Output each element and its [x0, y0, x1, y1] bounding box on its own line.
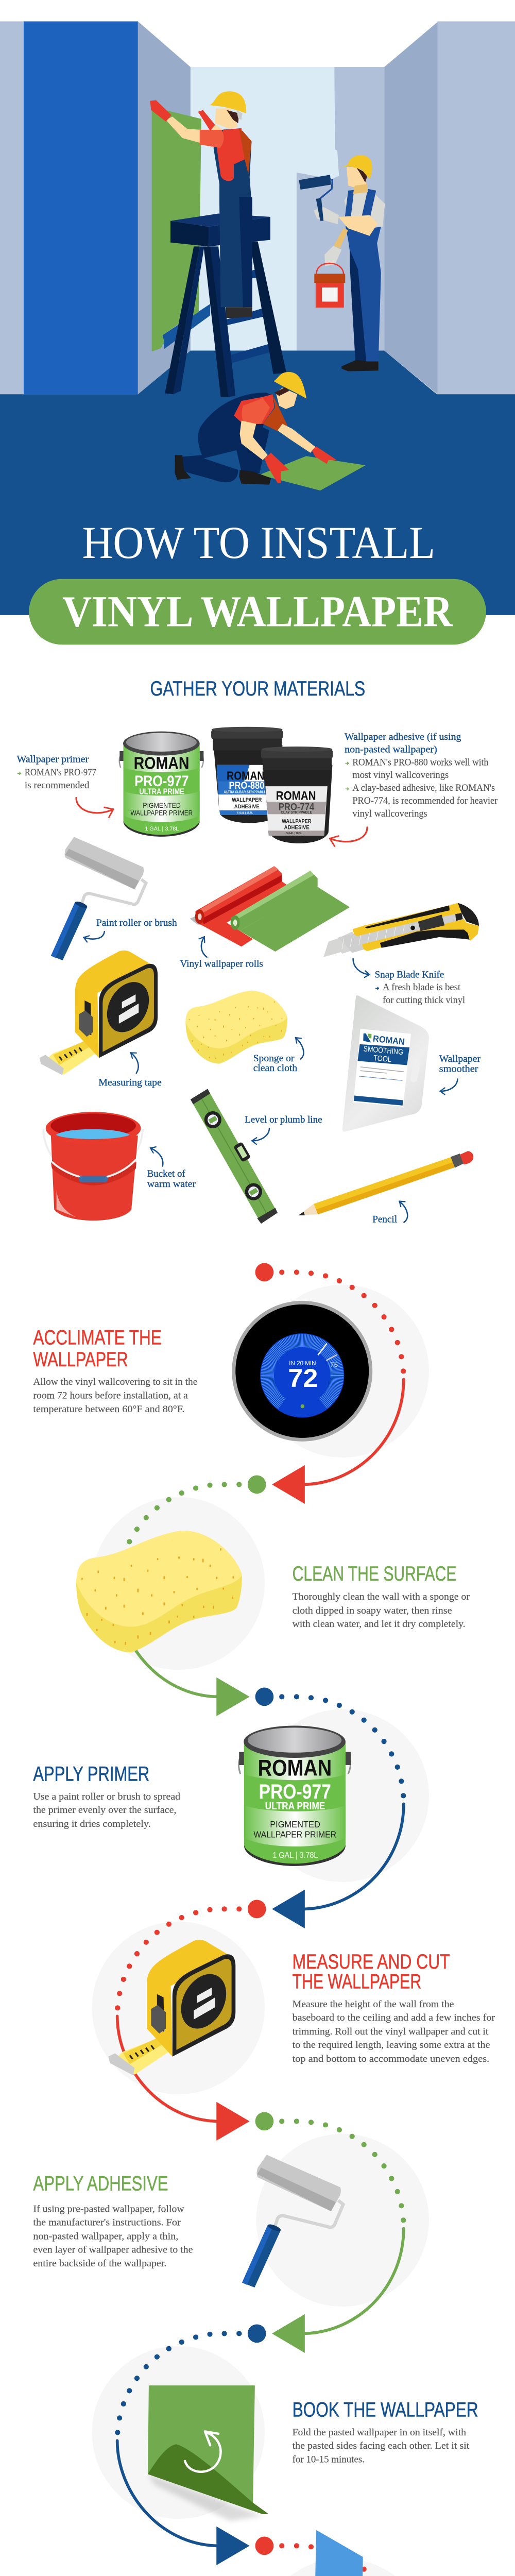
step: acclimate the wallpaper: [33, 1301, 372, 1442]
body: acclimate: [33, 1377, 197, 1415]
primer label: is recommended: [25, 780, 90, 791]
arrow: level: [252, 1128, 269, 1141]
heading: measure and cut: [293, 1951, 450, 1993]
icon: PRO-774 bucket: CLAY STRIPPABLE: [281, 811, 312, 815]
icon: paint roller: [242, 2155, 343, 2287]
body: acclimate: Allow the vinyl wallcovering to sit in the: [33, 1377, 197, 1387]
connector: step 6: [92, 2325, 266, 2565]
icon: wallpaper smoother: TOOL: [373, 1054, 392, 1064]
label: bucket of warm water: Bucket of: [147, 1168, 185, 1179]
icon: PRO-880 bucket: 5 GAL | 18.9L: [237, 812, 253, 815]
icon: PRO-774 bucket: ROMAN: [276, 789, 316, 803]
title: vinyl wallpaper: VINYL WALLPAPER: [62, 588, 453, 636]
worker kneeling on floor: [175, 372, 366, 490]
body: book: Fold the pasted wallpaper in on itself, with: [293, 2427, 466, 2438]
icon: thermostat: [232, 1301, 372, 1442]
body: measure: baseboard to the ceiling and add a few inches for: [293, 2012, 495, 2023]
icon: PRO-774 bucket: ADHESIVE: [284, 825, 310, 831]
primer label: Wallpaper primer: [17, 754, 89, 765]
body: measure: top and bottom to accommodate uneven edges.: [293, 2054, 489, 2064]
connector: step 3: [255, 1688, 429, 1928]
adhesive label: vinyl wallcoverings: [352, 808, 427, 819]
adhesive label: PRO-774, is recommended for heavier: [352, 795, 498, 806]
green pill: [29, 579, 486, 645]
label: sponge or clean cloth: Sponge or: [253, 1053, 295, 1064]
icon: thermostat: 76: [330, 1361, 338, 1368]
materials row: bottom labels and tools: [43, 995, 481, 1225]
icon: measuring tape: [108, 1940, 235, 2075]
arrow: roller: [84, 931, 105, 939]
icon: PRO-880 bucket: [211, 727, 283, 823]
adhesive label: ROMAN's PRO-880 works well with: [352, 757, 489, 768]
label: bucket of warm water: warm water: [147, 1179, 196, 1190]
heading: measure and cut: MEASURE AND CUT: [293, 1951, 450, 1973]
icon: bucket of water: [43, 1112, 143, 1221]
body: clean: [293, 1591, 470, 1630]
icon: PRO-880 bucket: PRO-880: [229, 781, 264, 791]
arrow: pencil: [400, 1201, 407, 1222]
heading: acclimate: WALLPAPER: [33, 1348, 128, 1371]
label: snap blade knife: [375, 969, 465, 1006]
body: primer: ensuring it dries completely.: [33, 1819, 151, 1829]
arrow: smoother: [440, 1079, 457, 1091]
arrow: rolls: [201, 937, 207, 957]
icon: measuring tape: [40, 951, 158, 1075]
icon: primer can: ULTRA PRIME: [139, 788, 184, 796]
label: pencil: Pencil: [372, 1214, 397, 1225]
body: clean: with clean water, and let it dry completely.: [293, 1619, 466, 1630]
label: wallpaper smoother: [439, 1054, 481, 1074]
icon: primer can: 1 GAL | 3.78L: [145, 826, 179, 832]
icon: wallpaper rolls: [190, 866, 350, 952]
icon: primer can: PIGMENTED: [270, 1819, 320, 1829]
heading: acclimate: [33, 1327, 162, 1371]
icon: primer can: WALLPAPER PRIMER: [253, 1829, 336, 1839]
body: clean: Thoroughly clean the wall with a sponge or: [293, 1591, 470, 1602]
icon: primer can: 1 GAL | 3.78L: [272, 1851, 318, 1860]
label: measuring tape: Measuring tape: [98, 1077, 162, 1088]
body: measure: [293, 1999, 495, 2064]
icon: PRO-880 bucket: ADHESIVE: [234, 804, 260, 810]
title banner: [29, 517, 486, 645]
icon: PRO-774 bucket: [261, 747, 333, 843]
body: adhesive: even layer of wallpaper adhesive to the: [33, 2244, 193, 2255]
icon: primer can: [119, 732, 203, 837]
connector: step 7: [255, 2537, 429, 2576]
body: primer: Use a paint roller or brush to spread: [33, 1791, 181, 1802]
icon: sponge: [76, 1531, 242, 1652]
icon: primer can: PRO-977: [259, 1781, 331, 1803]
icon: primer can: WALLPAPER PRIMER: [130, 809, 193, 817]
adhesive label: A clay-based adhesive, like ROMAN's: [352, 783, 495, 793]
label: bucket of warm water: [147, 1168, 196, 1190]
heading: gather your materials: GATHER YOUR MATERIALS: [150, 677, 365, 700]
connector: step 1: [255, 1263, 429, 1504]
icon: primer can: ROMAN: [134, 754, 190, 773]
label: snap blade knife: for cutting thick vinyl: [383, 995, 465, 1006]
steps: clean, primer, measure: [33, 1531, 495, 2075]
adhesive label: non-pasted wallpaper): [345, 744, 437, 755]
arrow: bucket: [150, 1148, 163, 1166]
icon: thermostat: IN 20 MIN: [289, 1360, 316, 1367]
icon: primer can: PIGMENTED: [143, 802, 181, 809]
label: sponge or clean cloth: [253, 1053, 298, 1074]
body: book: for 10-15 minutes.: [293, 2454, 365, 2465]
connector: step 4: [92, 1900, 266, 2141]
icon: wallpaper smoother: ROMAN: [372, 1033, 405, 1047]
room walls and floor: [0, 21, 515, 615]
heading: acclimate: ACCLIMATE THE: [33, 1327, 162, 1349]
body: acclimate: temperature between 60°F and 80°F.: [33, 1404, 184, 1415]
icon: primer can: PRO-977: [134, 773, 189, 790]
label: sponge or clean cloth: clean cloth: [253, 1063, 298, 1074]
adhesive label: Wallpaper adhesive (if using: [345, 732, 461, 742]
connector: step 2: [92, 1476, 266, 1716]
icon: primer can: [238, 1725, 351, 1866]
icon: PRO-774 bucket: WALLPAPER: [282, 819, 312, 825]
body: book: the pasted sides facing each other. Let it sit: [293, 2441, 470, 2451]
icon: snap blade knife: [323, 903, 479, 957]
icon: PRO-774 bucket: 5 GAL | 18.9L: [286, 832, 302, 835]
label: wallpaper smoother: Wallpaper: [439, 1054, 481, 1064]
icon: wallpaper smoother: [328, 995, 441, 1146]
heading: measure and cut: THE WALLPAPER: [293, 1971, 421, 1993]
adhesive label: [345, 732, 498, 819]
body: measure: trimming. Roll out the vinyl wallpaper and cut it: [293, 2026, 489, 2037]
arrow: tape: [131, 1053, 139, 1073]
body: clean: cloth dipped in soapy water, then rinse: [293, 1605, 452, 1616]
body: primer: the primer evenly over the surface,: [33, 1805, 176, 1816]
body: adhesive: entire backside of the wallpaper.: [33, 2258, 166, 2269]
primer label: ROMAN's PRO-977: [25, 767, 96, 778]
icon: pencil: [298, 1151, 473, 1215]
icon: PRO-880 bucket: ULTRA CLEAR STRIPPABLE: [224, 790, 266, 794]
body: acclimate: room 72 hours before installation, at a: [33, 1390, 188, 1401]
heading: apply adhesive: APPLY ADHESIVE: [33, 2172, 168, 2195]
hero illustration: [0, 21, 515, 615]
heading: apply primer: APPLY PRIMER: [33, 1763, 149, 1786]
panel: gather your materials: [17, 677, 498, 1075]
icon: wallpaper smoother: SMOOTHING: [363, 1044, 404, 1057]
body: adhesive: non-pasted wallpaper, apply a thin,: [33, 2231, 178, 2242]
worker with paint roller and bucket: [299, 155, 385, 371]
steps: adhesive, book: [33, 2155, 478, 2521]
label: wallpaper smoother: smoother: [439, 1063, 478, 1074]
body: measure: Measure the height of the wall from the: [293, 1999, 454, 2010]
icon: PRO-880 bucket: WALLPAPER: [232, 797, 262, 803]
body: adhesive: [33, 2204, 193, 2269]
heading: clean the surface: CLEAN THE SURFACE: [293, 1563, 456, 1585]
label: snap blade knife: A fresh blade is best: [383, 982, 461, 993]
label: vinyl wallpaper rolls: Vinyl wallpaper rolls: [180, 958, 263, 969]
arrow: to primer: [76, 798, 113, 813]
adhesive label: most vinyl wallcoverings: [352, 770, 449, 781]
icon: primer can: ROMAN: [258, 1755, 332, 1781]
primer label: [17, 754, 96, 791]
body: adhesive: the manufacturer's instructions. For: [33, 2217, 181, 2228]
body: measure: to the required length, leaving some extra at the: [293, 2040, 490, 2050]
steps: hanging, smooth, trim: [33, 2530, 475, 2576]
icon: sponge: [185, 991, 287, 1064]
arrow: knife: [353, 959, 369, 975]
worker hanging wallpaper on ladder: [150, 91, 252, 318]
icon: level: [191, 1089, 278, 1224]
body: primer: [33, 1791, 181, 1829]
wallpaper sheet on wall: [152, 107, 210, 351]
icon: PRO-880 bucket: ROMAN: [227, 769, 264, 782]
icon: worker hanging strip: [291, 2530, 364, 2576]
arrow: to adhesive: [330, 827, 367, 842]
ladder: [165, 214, 286, 397]
icon: primer can: ULTRA PRIME: [265, 1801, 325, 1812]
body: adhesive: If using pre-pasted wallpaper, follow: [33, 2204, 184, 2214]
title: how to install: HOW TO INSTALL: [82, 517, 435, 568]
arrow: sponge: [296, 1038, 303, 1059]
icon: thermostat: 72: [288, 1364, 318, 1393]
label: paint roller or brush: Paint roller or brush: [96, 918, 177, 928]
icon: PRO-774 bucket: PRO-774: [279, 802, 315, 813]
body: book: [293, 2427, 470, 2465]
label: snap blade knife: Snap Blade Knife: [375, 969, 444, 980]
label: level or plumb line: Level or plumb line: [245, 1114, 322, 1125]
icon: paint roller: [51, 837, 146, 960]
connector: step 5: [255, 2112, 429, 2353]
icon: booked wallpaper: [148, 2385, 268, 2521]
